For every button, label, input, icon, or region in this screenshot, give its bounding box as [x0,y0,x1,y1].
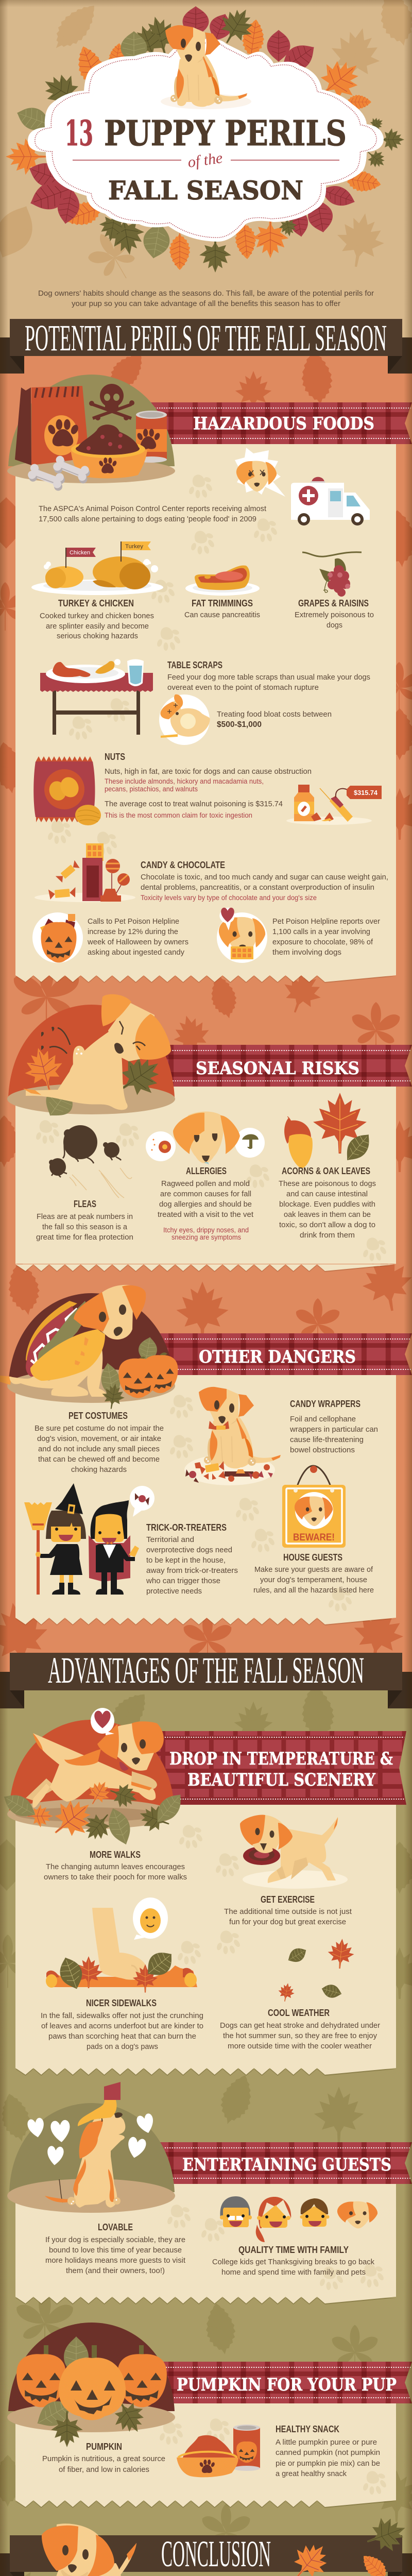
text: grapes and raisins: dogs [327,621,342,630]
icon: candy and chocolate [35,843,135,902]
text: fleas [36,1199,133,1242]
scratching puppy [23,994,171,1110]
text: acorns and oak leaves: ACORNS & OAK LEAVES [282,1166,370,1176]
dotted badge border [35,43,376,238]
icon: fleas [49,1125,132,1198]
ribbon: entertaining guests [144,2142,412,2184]
ribbon: drop in temperature [144,1731,406,1805]
icon: turkey and chicken [31,541,163,595]
text: trick-or-treaters: protective needs [146,1587,202,1596]
icon: skull and crossbones [89,384,134,420]
title: FALL SEASON [108,175,303,206]
text: pumpkin: of fiber, and low in calories [59,2466,149,2474]
text: cool weather: COOL WEATHER [268,2008,330,2018]
dome with leaping puppy [0,1708,187,1848]
text: bloat cost [217,710,332,729]
text: nicer sidewalks: In the fall, sidewalks offer not just the crunching [41,2012,203,2020]
panel: entertaining guests [7,2082,412,2304]
paw print decorations [47,474,278,855]
text: lovable [45,2222,185,2275]
text: more walks: owners to take their pooch for more walks [44,1873,187,1882]
dome with scratching puppy [7,994,175,1124]
text: pet costumes: that can be chewed off and become [38,1455,160,1464]
text: acorns and oak leaves [279,1166,376,1240]
text: bloat cost: Treating food bloat costs between [217,710,332,719]
text: acorns and oak leaves: drink from them [300,1231,355,1240]
white hearts [27,2113,156,2166]
ribbon: other dangers [144,1333,412,1375]
dome with pet food [7,375,175,492]
dome with hot dog costume puppy [0,1285,178,1411]
text: cool weather: the hot summer sun, so they are free to enjoy [223,2032,377,2040]
banner: potential perils [0,317,412,374]
text: candy and chocolate: CANDY & CHOCOLATE [141,860,225,870]
dad [220,2196,252,2227]
text: halloween calls [87,918,188,957]
text: healthy snack: HEALTHY SNACK [276,2424,339,2434]
text: ASPCA stat: 17,500 calls alone pertaining to dogs eating 'people food' in 2009 [39,515,256,523]
text: more walks [44,1850,187,1882]
text: pet costumes: PET COSTUMES [68,1411,128,1421]
text: house guests: your dog's temperament, house [260,1576,367,1584]
icon: paw on leaf-covered sidewalk [46,1897,197,1993]
text: halloween calls: increase by 12% during the [88,928,178,936]
conclusion leaves [2,2511,411,2576]
icon: fat trimmings [185,565,260,596]
text: quality time with family: College kids get Thanksgiving breaks to go back [212,2258,375,2266]
title: 13 [65,113,93,154]
text: healthy snack: canned pumpkin (not pumpkin [276,2449,380,2457]
text: lovable: more holidays means more guests to visit [45,2257,185,2265]
panel: seasonal risks [7,994,412,1272]
text: acorns and oak leaves: oak leaves in them can be [284,1211,371,1219]
text: halloween calls: Calls to Pet Poison Helpline [88,918,179,926]
text: turkey and chicken: serious choking hazards [57,632,138,640]
text: allergies: ALLERGIES [186,1166,227,1176]
text: more walks: MORE WALKS [90,1850,141,1860]
header: title badge with autumn wreath [6,1,404,273]
text: candy wrappers: Foil and cellophane [290,1415,356,1423]
text: chocolate calls [272,918,380,957]
text: quality time with family: QUALITY TIME WITH FAMILY [238,2245,349,2255]
icon: beware sign: BEWARE! [293,1532,335,1543]
text: nicer sidewalks: pads on a dog's paws [87,2043,158,2051]
icon: puppy with allergies [146,1112,265,1165]
text: trick-or-treaters: away from trick-or-treaters [146,1567,238,1575]
text: healthy snack: a great healthy snack [276,2470,347,2478]
text: pet costumes [35,1411,164,1474]
text: nuts: Nuts, high in fat, are toxic for dogs and can cause obstruction [105,768,312,776]
text: fat trimmings [184,598,260,619]
paw print decorations [169,1395,353,1612]
text: nuts [105,752,312,819]
text: table scraps: TABLE SCRAPS [167,660,222,670]
icon: acorn and oak leaves [284,1093,376,1168]
text: allergies: are common causes for fall [160,1190,251,1198]
panel: other dangers [0,1285,412,1625]
intro text: your pup so you can take advantage of all the benefits this season has to offer [72,300,340,308]
text: get exercise [224,1894,352,1926]
mom [256,2197,291,2242]
leaf pile [0,1776,187,1848]
panel: hazardous foods [7,375,412,983]
text: healthy snack: A little pumpkin puree or pure [276,2438,377,2447]
text: nicer sidewalks [41,1998,203,2051]
kid [300,2198,330,2227]
ribbon: pumpkin for your pup [144,2362,412,2403]
icon: puppy with frisbee [240,1815,348,1889]
text: nuts: NUTS [105,752,125,762]
text: chocolate calls: exposure to chocolate, 98% of [272,938,373,946]
text: trick-or-treaters: overprotective dogs need [146,1546,232,1554]
text: grapes and raisins: GRAPES & RAISINS [298,598,369,608]
puppy in hot dog costume [0,1285,146,1397]
text: candy and chocolate: Toxicity levels vary by type of chocolate and your dog's size [141,894,317,902]
text: table scraps: overeat even to the point of stomach rupture [167,684,319,692]
panel: drop in temperature and beautiful scenery [0,1708,406,2076]
text: get exercise: The additional time outside is not just [224,1908,352,1916]
text: pet costumes: Be sure pet costume do not impair the [35,1425,164,1433]
text: allergies [158,1166,253,1241]
text: fleas: FLEAS [74,1199,96,1209]
text: turkey and chicken [40,598,154,640]
candy wrapper pile [185,1461,273,1483]
text: acorns and oak leaves: These are poisonous to dogs [279,1180,376,1188]
icon: dog food bag [15,386,89,465]
text: trick-or-treaters: Territorial and [146,1536,194,1544]
text: acorns and oak leaves: toxic, so don't allow a dog to [279,1221,375,1229]
title [65,113,347,206]
leaping puppy [26,1721,164,1808]
text: allergies: dog allergies and should be [159,1200,252,1209]
text: halloween calls: week of Halloween by owners [87,938,188,946]
text: cool weather: more outside time with the cooler weather [228,2042,372,2050]
text: trick-or-treaters: to be kept in the house, [146,1556,226,1565]
text: grapes and raisins: Extremely poisonous to [295,611,374,619]
text: pumpkin: Pumpkin is nutritious, a great source [42,2455,165,2463]
text: candy and chocolate [141,860,388,902]
autumn leaf wreath [6,1,404,273]
dog [337,2201,377,2229]
icon: puppy among candy wrappers [184,1387,281,1485]
text: candy wrappers: cause life-threatening [290,1436,364,1444]
text: halloween calls: asking about ingested candy [88,948,185,957]
text: chocolate calls: 1,100 calls in a year involving [272,928,370,936]
heart speech bubble [91,1708,114,1735]
ribbon title: other dangers: OTHER DANGERS [199,1346,356,1367]
text: pumpkin [42,2442,165,2474]
text: chocolate calls: Pet Poison Helpline reports over [272,918,380,926]
intro text: Dog owners' habits should change as the seasons do. This fall, be aware of the potential perils for [38,290,374,298]
icon: bag of nuts [33,756,101,825]
dome with petted puppy [7,2082,175,2213]
icon: food bowl [71,425,147,478]
panel: pumpkin for your pup [7,2323,412,2508]
text: get exercise: GET EXERCISE [261,1894,315,1905]
text: allergies: treated with a visit to the vet [158,1211,253,1219]
paw print decorations [159,2418,387,2495]
icon: grapes [302,552,362,597]
title: of the [186,149,224,171]
text: candy wrappers [289,1399,378,1454]
icon: bloated puppy [159,694,210,745]
white scalloped badge [28,39,384,242]
intro text [38,290,374,308]
text: get exercise: fun for your dog but great exercise [229,1918,346,1926]
text: chocolate calls: them involving dogs [272,948,341,957]
ribbon: seasonal risks [144,1045,412,1087]
conclusion banner [0,2533,412,2576]
icon: turkey and chicken: Chicken [70,550,90,556]
text: lovable: If your dog is especially sociable, they are [45,2236,185,2244]
text: ASPCA stat: The ASPCA's Animal Poison Control Center reports receiving almost [39,505,266,513]
paw print decorations [35,1120,387,1261]
text: allergies: Ragweed pollen and mold [161,1180,250,1188]
text: house guests: Make sure your guests are aware of [254,1566,373,1574]
text: turkey and chicken: Cooked turkey and chicken bones [40,612,154,620]
ribbon: hazardous foods [144,402,412,444]
text: lovable: LOVABLE [98,2222,133,2232]
text: candy and chocolate: Chocolate is toxic, and too much candy and sugar can cause weight gain, [141,873,388,882]
icon: turkey and chicken: Turkey [125,544,144,550]
icon: falling leaves [277,1938,355,2003]
text: pumpkin: PUMPKIN [86,2442,122,2452]
icon: pumpkin candy bucket [32,912,83,963]
banner: advantages [0,1650,412,1708]
text: nuts: These include almonds, hickory and macadamia nuts, [105,777,264,785]
dome with jack-o-lanterns [7,2323,175,2447]
text: candy wrappers: CANDY WRAPPERS [290,1399,360,1409]
text: grapes and raisins [295,598,374,630]
text: quality time with family [212,2245,375,2277]
ribbon title: hazardous foods: HAZARDOUS FOODS [193,413,374,434]
text: allergies: sneezing are symptoms [171,1233,241,1241]
title: PUPPY PERILS [104,113,347,154]
text: trick-or-treaters [146,1522,238,1596]
paw print decorations [166,2205,385,2290]
itch marks [41,1027,70,1054]
text: fleas: great time for flea protection [36,1233,133,1242]
icon: dog bones [27,454,91,492]
icon: pumpkin food bowl and can [177,2425,260,2477]
text: nuts: This is the most common claim for toxic ingestion [105,811,252,819]
icon: witch trick-or-treater [24,1483,86,1595]
icon: table with scraps [40,659,153,735]
text: lovable: bound to love this time of year because [49,2246,182,2255]
text: nuts: pecans, pistachios, and walnuts [105,785,198,793]
faded background leaves: tan header [0,0,412,290]
text: lovable: them (and their owners, too!) [66,2267,165,2275]
icon: dizzy puppy head [235,448,285,497]
pumpkins and leaves [98,1335,178,1411]
text: trick-or-treaters: TRICK-OR-TREATERS [146,1522,227,1533]
icon: puppy with chocolate [217,908,267,963]
text: nicer sidewalks: NICER SIDEWALKS [86,1998,157,2008]
icon: family faces [220,2196,377,2242]
text: house guests [253,1552,374,1595]
icon: sitting puppy [161,25,251,109]
text: cool weather [220,2008,380,2050]
text: table scraps: Feed your dog more table scraps than usual make your dogs [167,673,370,682]
text: table scraps [167,660,370,692]
text: nicer sidewalks: of leaves and acorns underfoot but are kinder to [41,2022,203,2030]
icon: vampire trick-or-treater [89,1486,154,1595]
text: allergies: Itchy eyes, drippy noses, and [163,1226,249,1234]
text: cool weather: Dogs can get heat stroke and dehydrated under [220,2022,380,2030]
faded background leaves: olive sections [0,1683,412,2576]
text: nicer sidewalks: paws than scorching heat that can burn the [48,2032,196,2041]
text: candy wrappers: wrappers in particular can [289,1426,378,1434]
text: trick-or-treaters: who can trigger those [146,1577,220,1585]
puppy looking up [45,2082,125,2208]
text: fleas: Fleas are at peak numbers in [37,1213,133,1221]
ribbon title: seasonal risks: SEASONAL RISKS [196,1058,359,1078]
conclusion banner: CONCLUSION [161,2533,271,2574]
icon: medicine and vet bill [286,785,382,825]
text: pet costumes: and do not include any small pieces [38,1445,160,1453]
text: ASPCA stat [39,505,266,523]
text: candy and chocolate: dental problems, pancreatitis, or a constant overproduction of insulin [141,884,374,892]
text: candy wrappers: bowel obstructions [290,1446,355,1454]
paw print decorations [177,1825,241,1964]
text: healthy snack: pie or pumpkin pie mix) can be [276,2460,380,2468]
text: bloat cost: $500-$1,000 [217,720,262,729]
text: acorns and oak leaves: blockage. Even puddles with [279,1200,375,1209]
icon: ambulance [291,477,370,526]
text: house guests: rules, and all the hazards listed here [253,1586,374,1595]
text: house guests: HOUSE GUESTS [283,1552,342,1563]
text: turkey and chicken: are splinter easily and become [46,622,149,631]
text: fleas: the fall so this season is a [42,1223,128,1231]
text: pet costumes: dog's vision, movement, or air intake [37,1435,161,1443]
ribbon title: drop in temperature [169,1748,393,1790]
text: turkey and chicken: TURKEY & CHICKEN [58,598,134,608]
ribbon title: drop in temperature: BEAUTIFUL SCENERY [187,1769,376,1790]
icon: conclusion puppy [42,2523,136,2576]
icon: beware sign [282,1466,346,1548]
faded background leaves: orange sections [0,346,412,1674]
icon: dog food can [136,411,167,463]
text: healthy snack [276,2424,380,2478]
text: fat trimmings: FAT TRIMMINGS [192,598,253,608]
text: quality time with family: home and spend time with family and pets [221,2268,366,2277]
text: nuts: The average cost to treat walnut poisoning is $315.74 [105,800,283,808]
text: pet costumes: choking hazards [71,1466,127,1474]
text: acorns and oak leaves: and can cause intestinal [286,1190,368,1198]
icon: medicine and vet bill: $315.74 [354,789,378,796]
text: fat trimmings: Can cause pancreatitis [184,611,260,619]
text: more walks: The changing autumn leaves encourages [46,1863,185,1871]
